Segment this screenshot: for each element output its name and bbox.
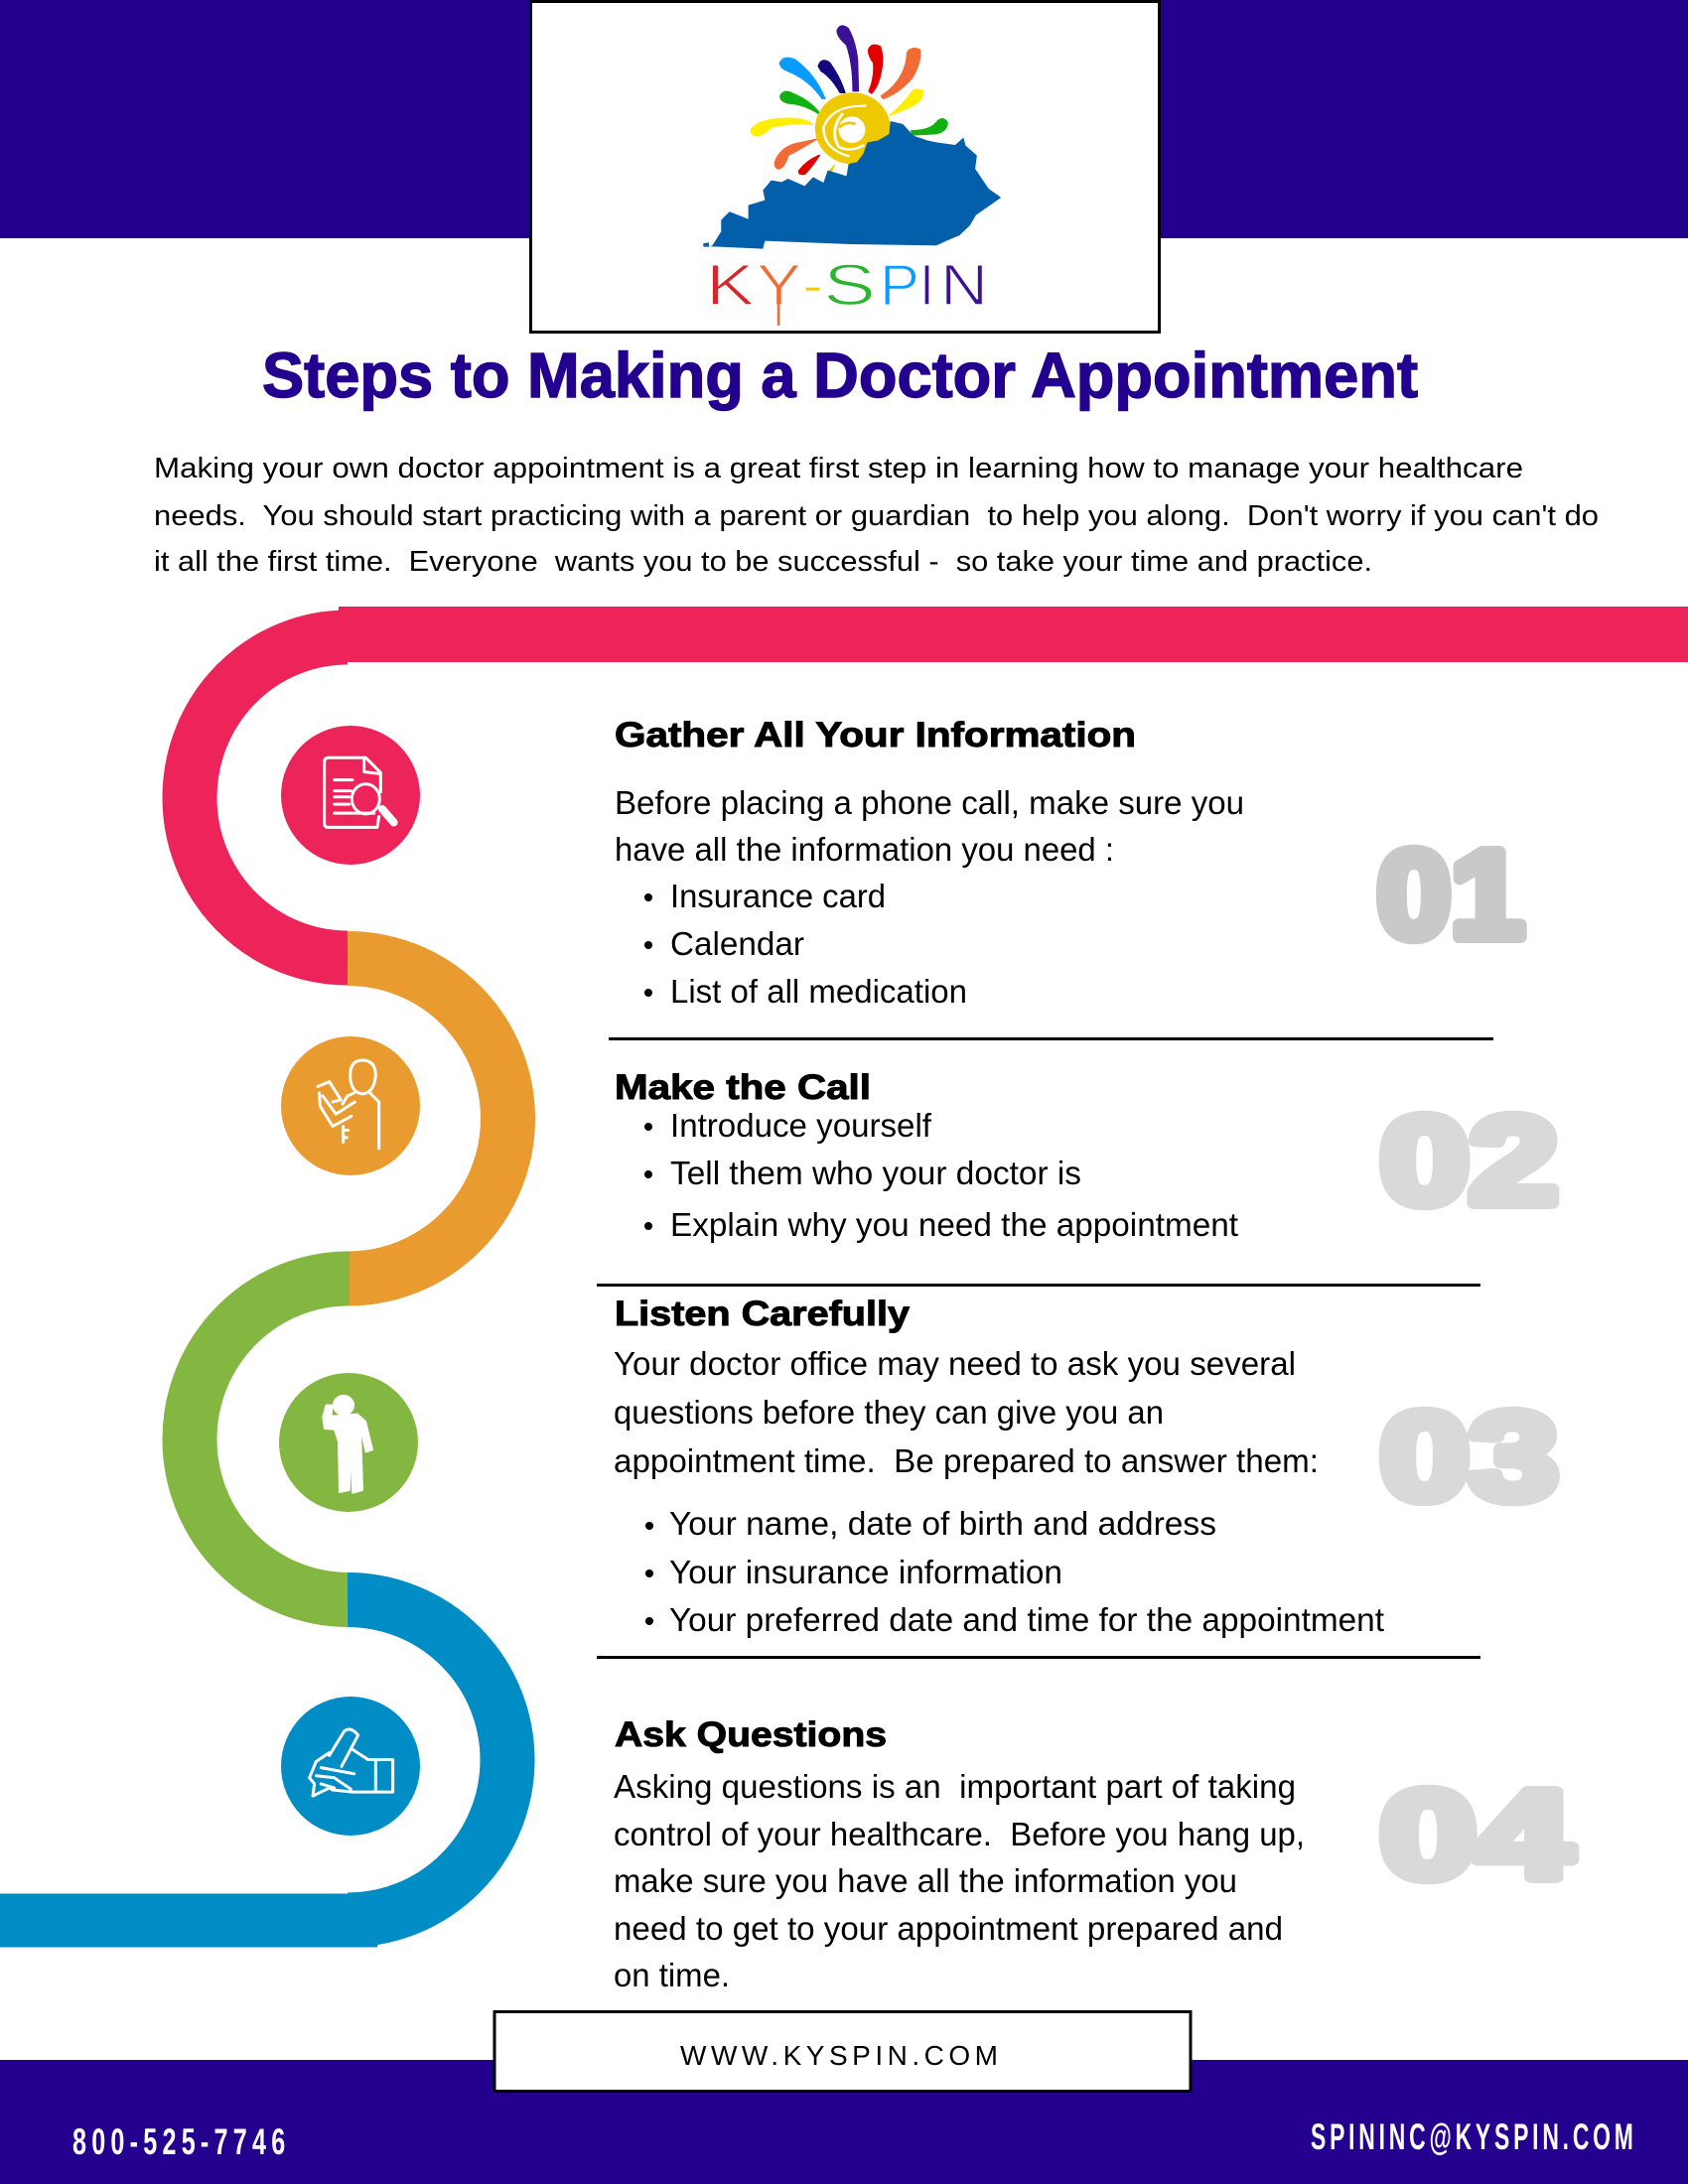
step 2 list: Introduce yourself <box>670 1107 932 1144</box>
step 3 text: Your preferred date and time for the appointment <box>669 1601 1384 1638</box>
logo box <box>530 2 1160 332</box>
step 1 text: have all the information you need : <box>615 831 1114 868</box>
step 2 list <box>644 1107 1238 1243</box>
step 2 heading: Make the Call <box>615 1068 871 1107</box>
blue timeline segment <box>0 1600 507 1948</box>
step 2 list: Explain why you need the appointment <box>670 1206 1238 1243</box>
number 01: 01 <box>1377 826 1524 964</box>
logo wordmark: Y <box>757 253 801 318</box>
icon: writing hand <box>281 1697 420 1836</box>
step 4 text: on time. <box>614 1957 730 1993</box>
serpentine timeline <box>0 607 1688 1948</box>
icon: document search <box>281 726 420 865</box>
icon: KY-SPIN sun and Kentucky logo <box>703 26 1001 249</box>
logo wordmark: S <box>823 253 876 318</box>
step 3 text <box>614 1345 1384 1638</box>
footer banner <box>0 2060 1688 2184</box>
logo wordmark: - <box>802 253 823 318</box>
intro paragraph: it all the first time. Everyone wants you to be successful - so take your time and practice. <box>154 546 1372 578</box>
step 1 heading: Gather All Your Information <box>615 716 1136 754</box>
website box <box>494 2011 1191 2091</box>
step 4 text: Asking questions is an important part of taking <box>614 1768 1296 1805</box>
number 04: 04 <box>1380 1766 1572 1904</box>
step 2: make the call <box>615 1068 1238 1243</box>
step 3 text: questions before they can give you an <box>614 1394 1164 1431</box>
logo wordmark: K <box>706 253 755 318</box>
orange timeline segment <box>348 958 508 1279</box>
number 02: 02 <box>1380 1092 1558 1230</box>
website box: WWW.KYSPIN.COM <box>680 2040 998 2071</box>
phone number: 800-525-7746 <box>72 2120 285 2162</box>
step 2 list: Tell them who your doctor is <box>670 1155 1081 1191</box>
logo wordmark: I <box>919 253 934 318</box>
step 4: ask questions <box>614 1715 1305 1993</box>
step 3 text: Your doctor office may need to ask you several <box>614 1345 1296 1382</box>
green timeline segment <box>190 1279 350 1600</box>
logo wordmark: N <box>940 253 988 318</box>
step 3 heading: Listen Carefully <box>615 1295 911 1333</box>
step 1 text: Before placing a phone call, make sure you <box>615 784 1244 821</box>
step 3: listen carefully <box>614 1295 1384 1638</box>
step 3 text: Your name, date of birth and address <box>669 1505 1216 1542</box>
step 4 text <box>614 1768 1305 1993</box>
intro paragraph: Making your own doctor appointment is a great first step in learning how to manage your healthcare <box>154 453 1523 484</box>
icon: person thinking <box>279 1373 418 1512</box>
icon: person on phone <box>281 1036 420 1175</box>
step 1 text: Calendar <box>670 925 804 962</box>
step 4 heading: Ask Questions <box>615 1715 887 1754</box>
red timeline segment <box>190 607 1688 958</box>
step 3 text: appointment time. Be prepared to answer them: <box>614 1442 1319 1479</box>
intro paragraph: needs. You should start practicing with a parent or guardian to help you along. Don't worry if you can't do <box>154 500 1599 532</box>
step 4 text: control of your healthcare. Before you hang up, <box>614 1816 1305 1852</box>
number 03: 03 <box>1380 1388 1558 1526</box>
logo wordmark <box>706 253 988 326</box>
step 4 text: need to get to your appointment prepared and <box>614 1910 1283 1947</box>
step 4 text: make sure you have all the information you <box>614 1862 1237 1899</box>
step 1: gather information <box>615 716 1244 1010</box>
top banner <box>0 0 1688 238</box>
step 1 text <box>615 784 1244 1010</box>
step 1 text: Insurance card <box>670 878 886 914</box>
logo wordmark: P <box>880 253 919 318</box>
step 1 text: List of all medication <box>670 973 967 1010</box>
intro paragraph <box>154 453 1599 578</box>
step 3 text: Your insurance information <box>669 1554 1062 1590</box>
title: Steps to Making a Doctor Appointment <box>262 340 1418 411</box>
email address: SPININC@KYSPIN.COM <box>1311 2116 1633 2157</box>
